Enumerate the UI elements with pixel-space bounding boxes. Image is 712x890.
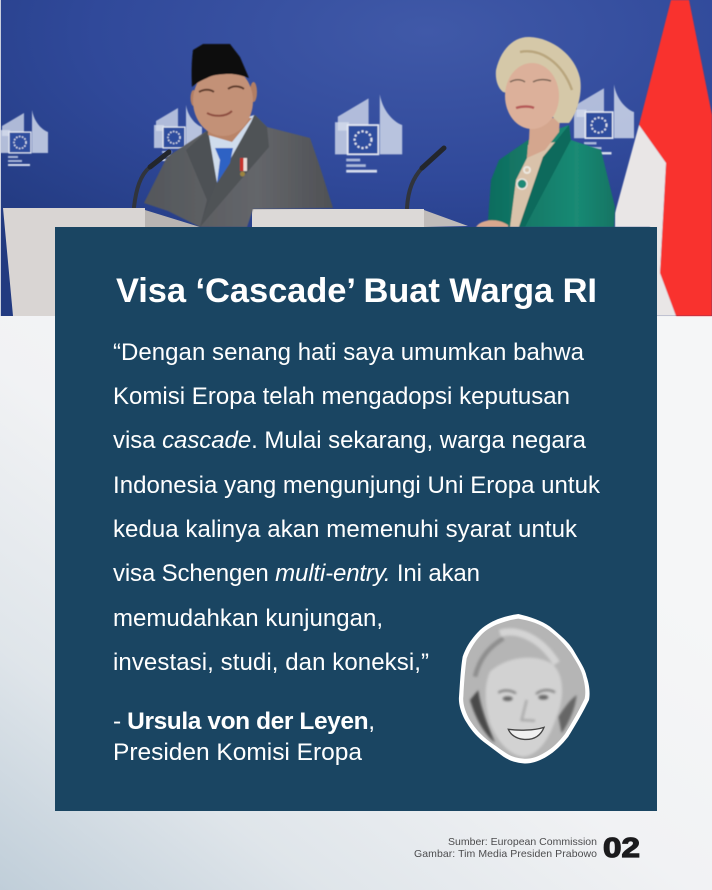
flag bbox=[615, 0, 712, 316]
page number: 02 bbox=[603, 832, 640, 863]
source credits bbox=[414, 836, 597, 860]
photo: leaders at podiums bbox=[0, 0, 712, 316]
microphones bbox=[134, 148, 444, 208]
woman in green jacket bbox=[476, 37, 615, 227]
attribution bbox=[113, 708, 375, 766]
quote text: investasi, studi, dan koneksi,” bbox=[113, 649, 429, 676]
source credits: Sumber: European Commission bbox=[448, 836, 597, 848]
page background bbox=[0, 316, 712, 890]
quote text: visa Schengen multi-entry. Ini akan bbox=[113, 560, 480, 587]
man in grey suit bbox=[144, 44, 333, 227]
panel: quote bbox=[55, 227, 657, 811]
title: Visa ‘Cascade’ Buat Warga RI bbox=[116, 272, 597, 310]
quote text bbox=[113, 339, 601, 676]
portrait: Ursula von der Leyen bbox=[459, 614, 590, 763]
quote text: Komisi Eropa telah mengadopsi keputusan bbox=[113, 383, 570, 410]
attribution: - Ursula von der Leyen, bbox=[113, 708, 375, 735]
attribution: Presiden Komisi Eropa bbox=[113, 739, 362, 766]
quote text: memudahkan kunjungan, bbox=[113, 605, 383, 632]
quote text: visa cascade. Mulai sekarang, warga negara bbox=[113, 427, 587, 454]
quote text: kedua kalinya akan memenuhi syarat untuk bbox=[113, 516, 578, 543]
quote text: “Dengan senang hati saya umumkan bahwa bbox=[113, 339, 585, 366]
icon: European Commission logos bbox=[0, 84, 634, 173]
source credits: Gambar: Tim Media Presiden Prabowo bbox=[414, 848, 597, 860]
podiums bbox=[3, 208, 468, 316]
quote text: Indonesia yang mengunjungi Uni Eropa untuk bbox=[113, 472, 601, 499]
